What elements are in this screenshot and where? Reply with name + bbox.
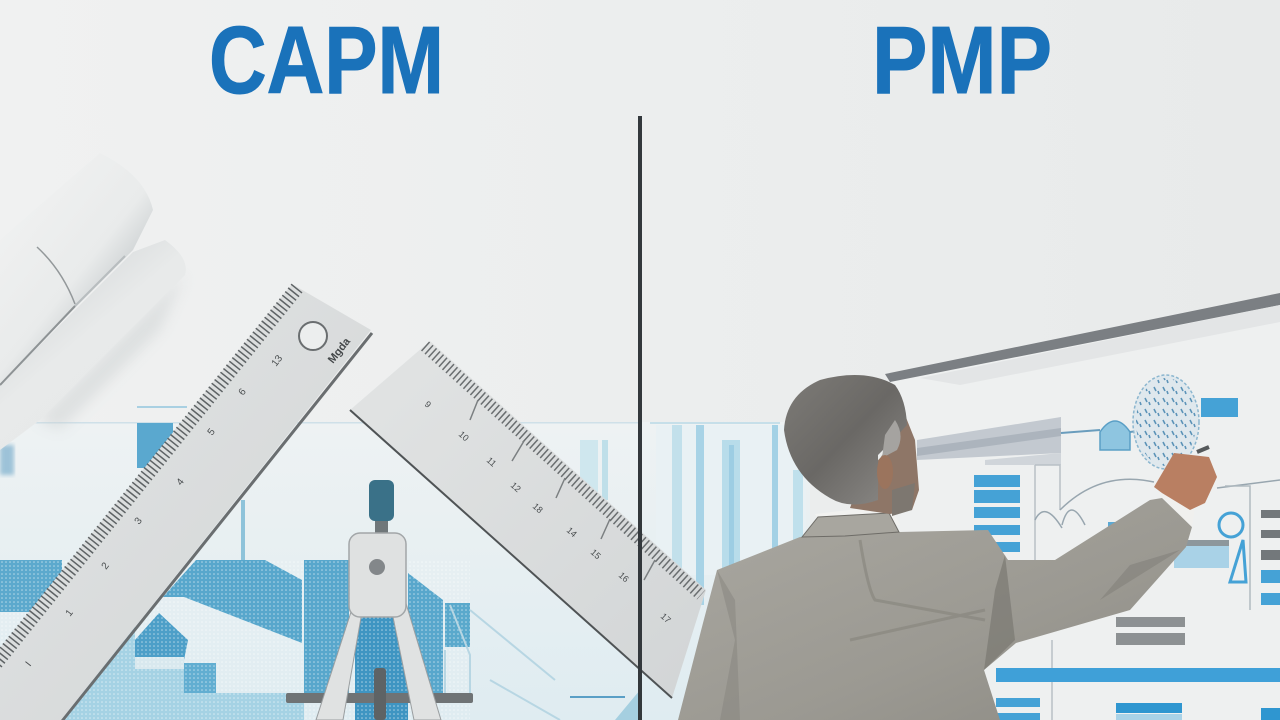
icon: right steel set square: 10 bbox=[457, 429, 471, 443]
icon: left steel ruler: 2 bbox=[100, 560, 112, 572]
icon: right steel set square: 11 bbox=[485, 455, 498, 469]
icon: rolled blueprints bbox=[0, 153, 186, 450]
icon: cup sketch bbox=[1100, 421, 1130, 450]
icon: left steel ruler: I bbox=[24, 660, 34, 669]
icon: left steel ruler: 4 bbox=[175, 476, 187, 488]
ear bbox=[877, 455, 893, 489]
icon: left steel ruler: 3 bbox=[133, 515, 145, 527]
heading: PMP: PMP bbox=[872, 7, 1052, 114]
icon: drafting compass bbox=[286, 480, 473, 720]
face and neck bbox=[850, 415, 919, 514]
jacket collar bbox=[802, 513, 899, 537]
divider: vertical line bbox=[638, 116, 642, 720]
panel: whiteboard bbox=[885, 293, 1280, 720]
icon: left steel ruler: 5 bbox=[206, 426, 218, 438]
icon: left steel ruler: 13 bbox=[270, 353, 285, 369]
icon: right steel set square: 18 bbox=[531, 501, 545, 515]
icon: left steel ruler: 1 bbox=[64, 607, 76, 619]
icon: right steel set square: 15 bbox=[589, 547, 603, 561]
icon: dotted circle sketch bbox=[1133, 375, 1199, 469]
hair bbox=[784, 375, 907, 505]
shirt collar bbox=[815, 505, 900, 525]
icon: businessman drawing on whiteboard bbox=[678, 375, 1217, 720]
icon: right steel set square: 17 bbox=[659, 611, 673, 625]
icon: right steel set square: 12 bbox=[509, 480, 523, 494]
icon: right steel set square: 16 bbox=[617, 570, 631, 584]
icon: right steel set square: 9 bbox=[423, 399, 433, 410]
cuff bbox=[1158, 488, 1195, 527]
icon: left steel ruler: 6 bbox=[237, 386, 249, 398]
icon: right steel set square bbox=[350, 341, 706, 698]
heading: CAPM: CAPM bbox=[209, 7, 444, 114]
jacket bbox=[678, 498, 1192, 720]
icon: left steel ruler: Mgda bbox=[326, 335, 354, 366]
icon: left steel ruler bbox=[0, 284, 372, 720]
icon: right steel set square: 14 bbox=[565, 525, 579, 539]
hand bbox=[1154, 453, 1217, 510]
panel: CAPM blueprint background bbox=[0, 406, 810, 720]
